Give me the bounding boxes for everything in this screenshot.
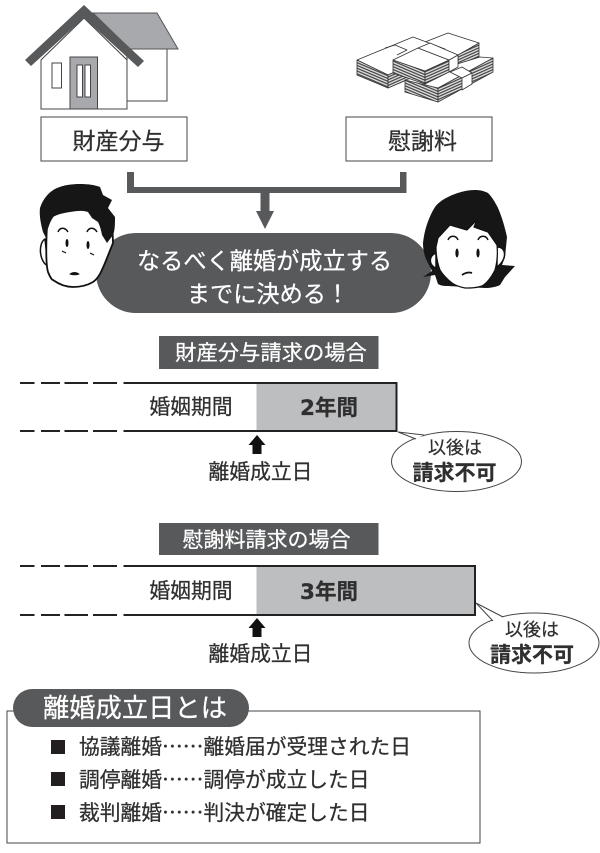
- list item: 裁判離婚: 裁判離婚……判決が確定した日: [79, 796, 370, 826]
- callout: no claim after 3 years: 以後は: [505, 620, 559, 640]
- callout: no claim after 3 years: 請求不可: [490, 644, 574, 667]
- speech pill: なるべく離婚が成立する: [137, 248, 392, 274]
- banner: 財産分与請求の場合: 財産分与請求の場合: [175, 341, 367, 365]
- label box: 財産分与: [41, 117, 187, 161]
- label box: 慰謝料: 慰謝料: [388, 128, 457, 154]
- banner: 慰謝料請求の場合: 慰謝料請求の場合: [182, 529, 350, 552]
- arrow: connector merging into speech pill: [127, 172, 406, 229]
- speech pill: [96, 233, 431, 313]
- list item: 調停離婚: 調停離婚……調停が成立した日: [79, 763, 370, 793]
- callout: no claim after 3 years: [469, 603, 599, 673]
- timeline: property division: 2年間: [300, 396, 358, 421]
- panel heading pill: 離婚成立日とは: [43, 693, 227, 723]
- arrow: divorce date: [248, 435, 266, 454]
- label: 離婚成立日: 離婚成立日: [209, 461, 312, 484]
- label box: 財産分与: 財産分与: [72, 128, 164, 154]
- arrow: divorce date: [248, 618, 266, 637]
- timeline: consolation money: 3年間: [300, 580, 358, 605]
- label box: 慰謝料: [346, 117, 492, 161]
- callout: no claim after 2 years: 以後は: [428, 438, 482, 458]
- icon: man's face: [40, 184, 115, 287]
- icon: stacks of money: [357, 33, 493, 102]
- timeline: consolation money: 婚姻期間: [149, 580, 233, 603]
- label: 離婚成立日: 離婚成立日: [209, 643, 312, 666]
- banner: 慰謝料請求の場合: [159, 523, 378, 555]
- icon: house: [25, 5, 178, 109]
- icon: woman's face: [423, 190, 515, 288]
- callout: no claim after 2 years: [392, 432, 522, 492]
- banner: 財産分与請求の場合: [159, 336, 378, 369]
- timeline: property division: [20, 383, 396, 431]
- timeline: property division: 婚姻期間: [149, 396, 233, 419]
- panel: definition of divorce date: [7, 689, 480, 843]
- panel heading pill: [13, 689, 249, 727]
- timeline: consolation money: [20, 566, 475, 615]
- speech pill: までに決める！: [187, 281, 349, 307]
- list item: 協議離婚: 協議離婚……離婚届が受理された日: [79, 730, 411, 760]
- callout: no claim after 2 years: 請求不可: [412, 462, 496, 485]
